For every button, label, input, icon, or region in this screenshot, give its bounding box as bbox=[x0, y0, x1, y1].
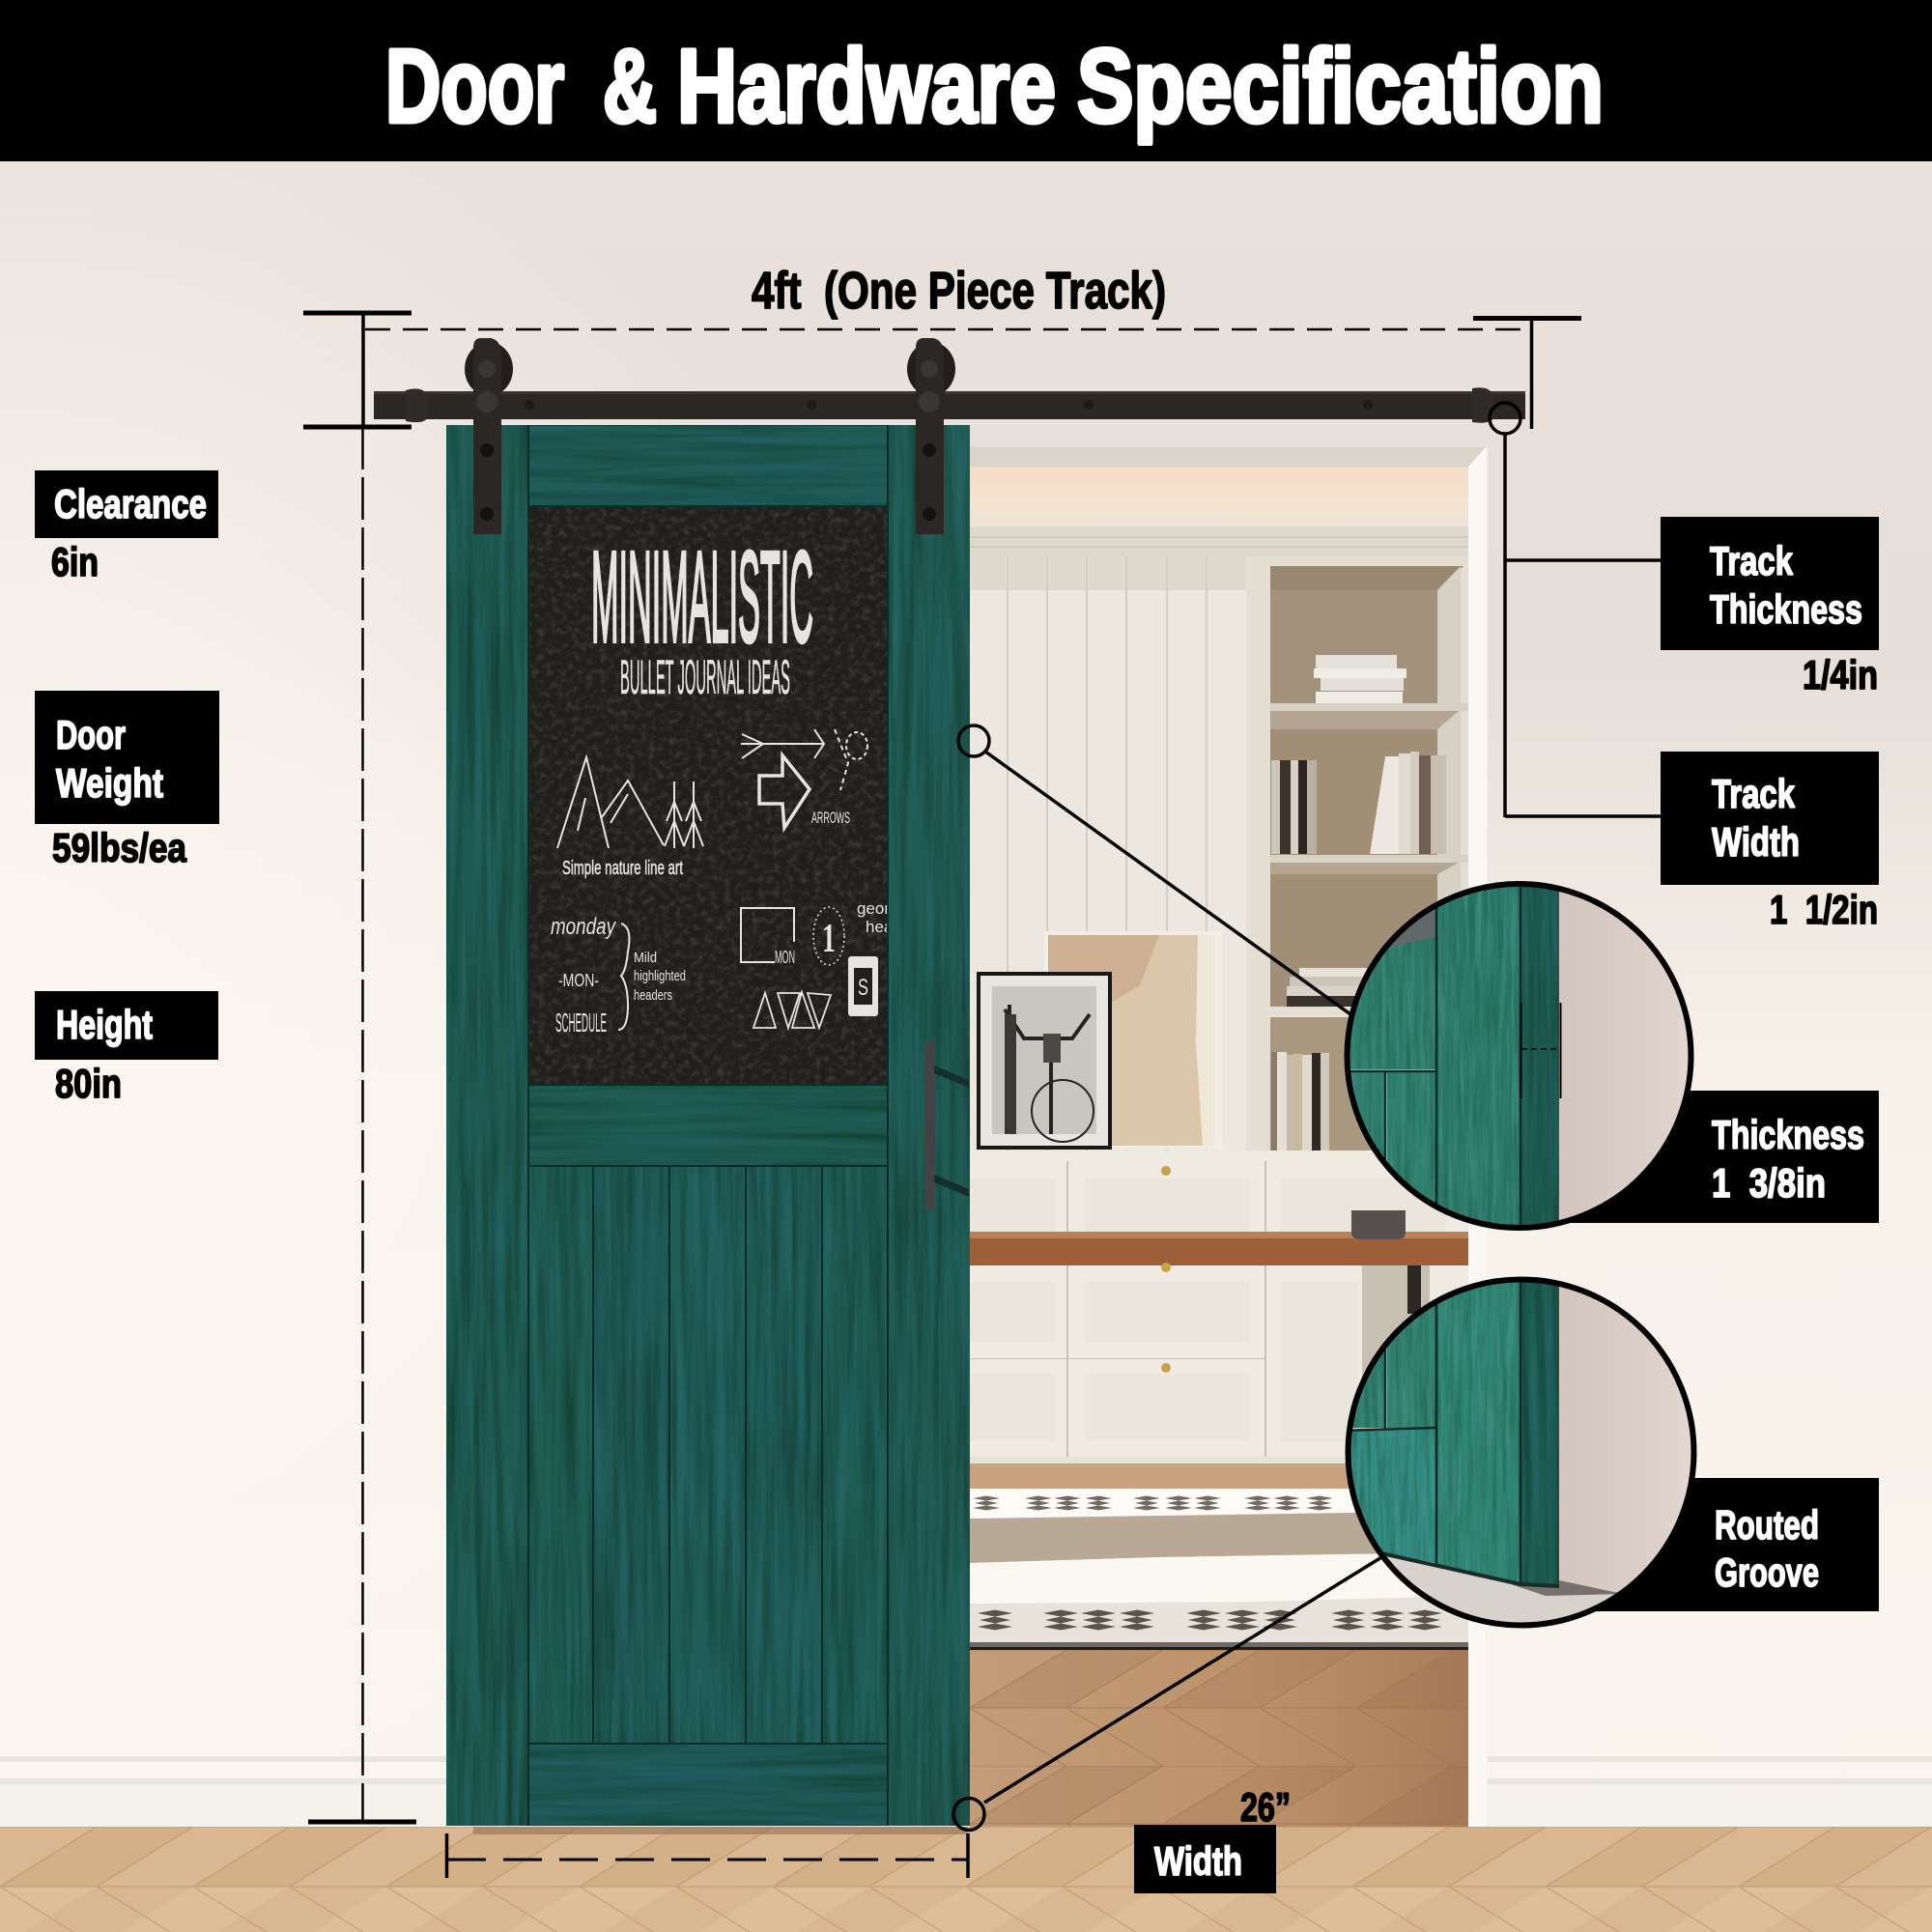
cabinets and desk bbox=[970, 1151, 1468, 1457]
callout: track thickness: Thickness bbox=[1710, 586, 1862, 632]
callout: height bbox=[35, 991, 218, 1106]
leader to bottom magnifier bbox=[953, 1556, 1383, 1830]
title: Specification bbox=[1077, 27, 1604, 144]
door rails bbox=[529, 426, 888, 1825]
leader to top magnifier bbox=[958, 725, 1350, 1014]
width value: 26” bbox=[1240, 1784, 1291, 1830]
callout: door weight bbox=[35, 691, 219, 870]
track stop left bbox=[406, 388, 428, 422]
chalk caption nature: Simple nature line art bbox=[562, 858, 683, 879]
title bbox=[385, 27, 1604, 144]
callout: door weight: Weight bbox=[56, 760, 163, 806]
chalk headers list: -MON- bbox=[558, 971, 599, 990]
shelf books lower bbox=[1271, 968, 1367, 1151]
chalk headers list bbox=[551, 914, 686, 1037]
callout: track width: 1 1/2in bbox=[1770, 887, 1878, 932]
callout: width bbox=[1134, 1825, 1276, 1893]
track length label: 4ft (One Piece Track) bbox=[752, 262, 1166, 320]
chalk geometric headers: head bbox=[866, 918, 902, 936]
right hanger bbox=[907, 338, 955, 534]
barn door track bbox=[374, 338, 1525, 534]
chalk geometric headers bbox=[740, 905, 887, 1031]
title: & bbox=[603, 27, 657, 144]
track stop right bbox=[1472, 387, 1494, 423]
callout: door weight: Door bbox=[56, 712, 126, 757]
callout: track width: Track bbox=[1712, 771, 1795, 816]
width dimension bbox=[446, 1833, 968, 1878]
clearance dimension bbox=[303, 313, 412, 427]
callout: thickness: Thickness bbox=[1712, 1112, 1864, 1157]
framed watercolor art bbox=[1044, 931, 1222, 1150]
room through doorway bbox=[956, 447, 1488, 1827]
callout: clearance: Clearance bbox=[54, 481, 207, 526]
beadboard back wall bbox=[970, 556, 1246, 1151]
bookshelf bbox=[1246, 556, 1468, 1151]
chalk arrows bbox=[741, 729, 867, 828]
framed bicycle photo bbox=[977, 972, 1112, 1150]
callout: width: Width bbox=[1154, 1838, 1242, 1884]
door panel seams bbox=[528, 425, 888, 1826]
floor foreground bbox=[0, 1827, 1932, 1932]
door bbox=[446, 425, 970, 1826]
callout: thickness bbox=[1546, 1091, 1879, 1223]
callout: clearance: 6in bbox=[51, 539, 99, 584]
chalk headers list: Mild bbox=[634, 950, 657, 966]
callout: routed groove bbox=[1546, 1478, 1879, 1611]
door handle bbox=[924, 1041, 969, 1209]
height dimension bbox=[308, 427, 416, 1822]
callout: routed groove: Groove bbox=[1715, 1549, 1819, 1595]
chalk headers list: monday bbox=[551, 914, 617, 940]
door planks bbox=[529, 1167, 887, 1743]
title band bbox=[0, 0, 1932, 161]
stacked books bbox=[1314, 655, 1406, 703]
text: MINIMALISTIC bbox=[591, 526, 813, 669]
callout: height: 80in bbox=[55, 1061, 122, 1106]
track length dimension bbox=[365, 319, 1581, 429]
chalk geometric headers: 1 bbox=[822, 917, 836, 961]
chalk headers list: headers bbox=[634, 987, 672, 1004]
title: Hardware bbox=[677, 27, 1056, 144]
callout: thickness: 1 3/8in bbox=[1712, 1160, 1826, 1206]
leader lines for track bbox=[1490, 403, 1661, 817]
chalk caption arrows: ARROWS bbox=[811, 809, 850, 827]
callout: track width bbox=[1661, 752, 1879, 932]
callout: track thickness bbox=[1661, 517, 1879, 697]
callout: door weight: 59lbs/ea bbox=[52, 825, 187, 870]
left hanger bbox=[465, 338, 513, 534]
mug bbox=[1351, 1210, 1406, 1239]
magnifier: routed groove bbox=[1343, 1275, 1723, 1633]
door: BULLET JOURNAL IDEAS bbox=[620, 650, 790, 704]
magnifier: door edge thickness bbox=[1345, 881, 1694, 1231]
chalk geometric headers: geome bbox=[857, 899, 907, 918]
chalk headers list: highlighted bbox=[634, 968, 686, 984]
door stiles bbox=[446, 425, 970, 1826]
chalk mountains and trees bbox=[557, 757, 703, 848]
callout: clearance bbox=[35, 470, 218, 584]
callout: height: Height bbox=[56, 1002, 153, 1047]
chalk geometric headers: MON bbox=[775, 948, 795, 967]
upright books bbox=[1271, 752, 1446, 854]
chalk geometric headers: S bbox=[858, 975, 868, 1001]
rug and room floor bbox=[970, 1457, 1468, 1827]
chalkboard bbox=[529, 507, 907, 1084]
chalk headers list: SCHEDULE bbox=[555, 1008, 607, 1037]
callout: routed groove: Routed bbox=[1715, 1502, 1819, 1548]
callout: track thickness: Track bbox=[1710, 538, 1793, 583]
thickness tick marks bbox=[1520, 1003, 1561, 1098]
title: Door bbox=[385, 27, 564, 144]
callout: track width: Width bbox=[1712, 819, 1800, 865]
callout: track thickness: 1/4in bbox=[1803, 652, 1878, 697]
